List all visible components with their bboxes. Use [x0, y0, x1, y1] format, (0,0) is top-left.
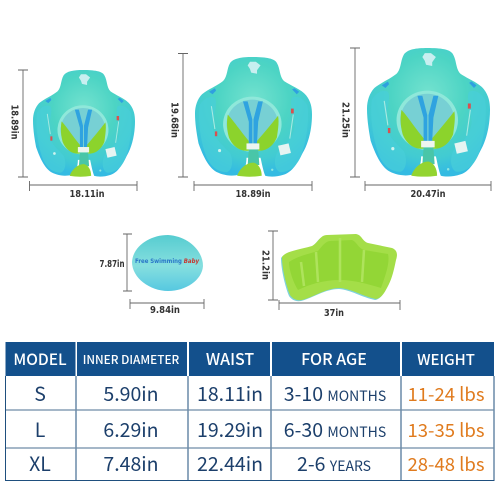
height dimension L: 19.68in — [168, 102, 180, 138]
canopy disc: Free Swimming Baby — [135, 257, 200, 265]
row S — [34, 378, 484, 407]
table header row: FOR AGE — [301, 346, 367, 370]
height dimension cushion: 21.2in — [260, 250, 270, 280]
table header row — [6, 342, 494, 376]
row XL — [29, 448, 484, 477]
row dividers — [6, 410, 494, 448]
canopy disc — [100, 234, 204, 316]
width dimension L — [194, 181, 312, 200]
row S: S — [34, 378, 46, 407]
table header row: WEIGHT — [417, 349, 475, 370]
width dimension cushion — [279, 300, 400, 319]
green seat cushion — [260, 231, 400, 319]
height dimension L — [168, 54, 188, 177]
row S: 18.11in — [197, 378, 263, 407]
size table — [5, 342, 494, 480]
row L: 6-30 MONTHS — [284, 414, 386, 443]
row L: 13-35 lbs — [408, 417, 484, 443]
height dimension XL: 21.25in — [340, 102, 350, 138]
float size S — [8, 70, 137, 200]
width dimension XL — [365, 181, 491, 200]
height dimension S: 18.89in — [8, 104, 20, 140]
table header row: MODEL — [13, 348, 67, 370]
row XL: 2-6 YEARS — [297, 448, 371, 477]
height dimension XL — [340, 48, 360, 177]
row L: L — [35, 414, 46, 443]
table header row: INNER DIAMETER — [83, 351, 180, 368]
width dimension S: 18.11in — [70, 189, 105, 200]
width dimension L: 18.89in — [236, 189, 271, 200]
table header row: WAIST — [206, 346, 254, 370]
row L: 6.29in — [103, 414, 159, 443]
width dimension disc: 9.84in — [150, 305, 180, 316]
row S: 11-24 lbs — [408, 381, 484, 407]
row L: 19.29in — [197, 414, 263, 443]
width dimension XL: 20.47in — [410, 189, 446, 200]
row L — [35, 414, 484, 443]
table grid — [6, 376, 494, 480]
height dimension disc: 7.87in — [100, 259, 125, 270]
row XL: 7.48in — [103, 448, 159, 477]
float size L — [168, 54, 312, 200]
row S: 3-10 MONTHS — [284, 378, 386, 407]
row XL: 28-48 lbs — [408, 451, 484, 477]
row XL: 22.44in — [197, 448, 263, 477]
row S: 5.90in — [103, 378, 159, 407]
row XL: XL — [29, 448, 51, 477]
height dimension cushion — [260, 231, 278, 300]
width dimension cushion: 37in — [324, 308, 344, 319]
float size XL — [340, 48, 491, 200]
